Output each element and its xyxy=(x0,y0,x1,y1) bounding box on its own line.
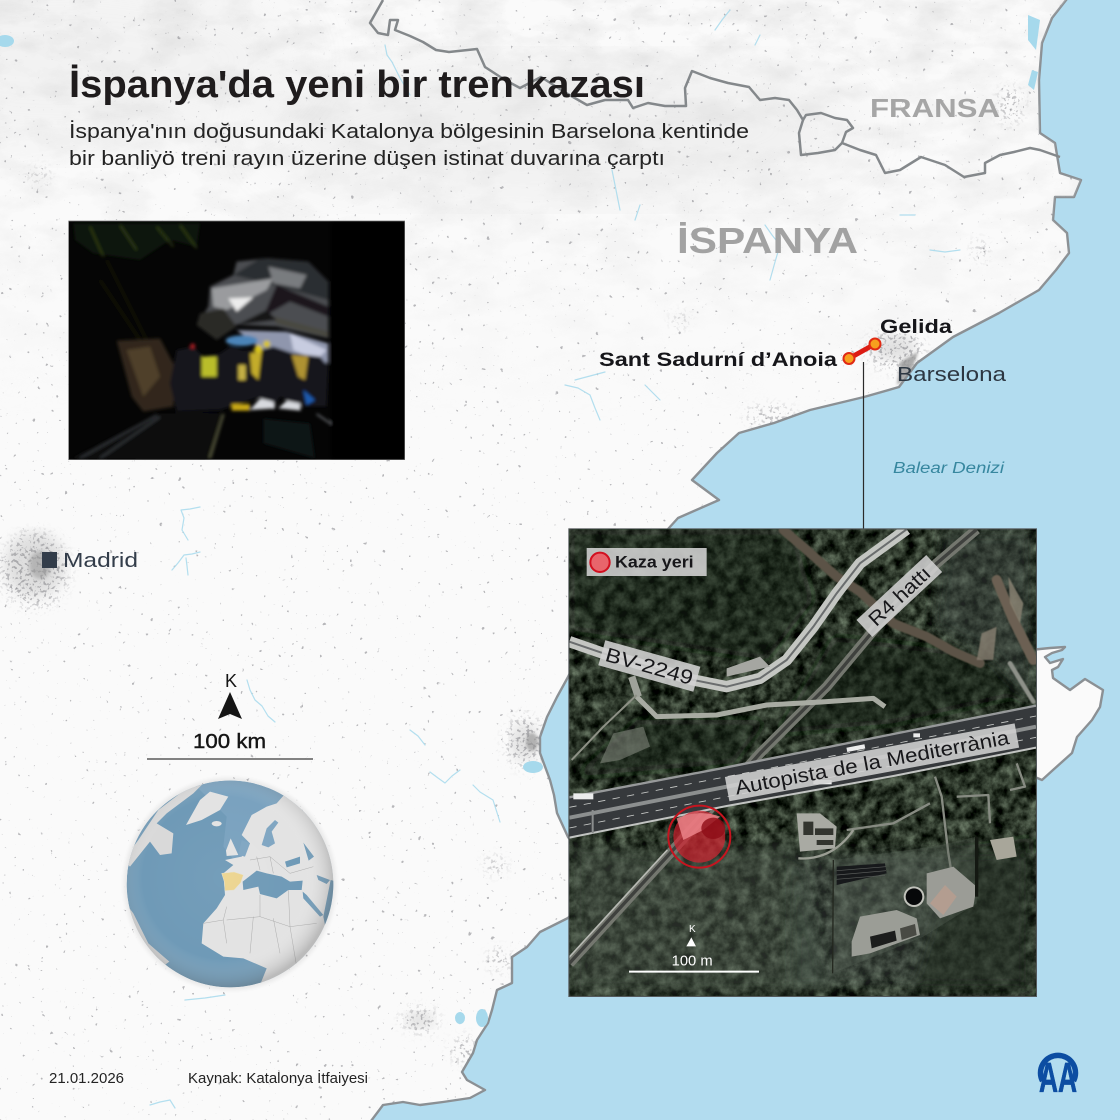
globe: North Sea xyxy=(242,843,250,857)
logo: Anadolu Agency xyxy=(1039,1054,1077,1101)
road label: BV-2249 xyxy=(598,640,700,692)
globe: British Isles xyxy=(226,838,238,856)
satellite: vegetation tones xyxy=(570,530,1033,993)
source: Kaynak: Katalonya İtfaiyesi xyxy=(188,1069,368,1087)
satellite: accident location xyxy=(668,806,730,868)
map: France–Spain border xyxy=(370,0,1060,177)
label: Spain: İSPANYA xyxy=(677,220,858,261)
label: Barselona: Barselona xyxy=(897,364,1007,386)
map scale: 100 km: 100 km xyxy=(193,731,266,753)
north arrow xyxy=(218,671,242,719)
locator globe xyxy=(123,778,343,993)
globe: Baltic xyxy=(262,820,278,847)
satellite north arrow xyxy=(686,924,696,946)
subtitle xyxy=(69,120,749,170)
road label: BV-2249: BV-2249 xyxy=(603,644,695,690)
route marker: Sant Sadurní d'Anoia to Gelida xyxy=(844,338,880,364)
map: island xyxy=(1030,647,1103,780)
satellite panel xyxy=(567,528,1037,997)
globe: country borders xyxy=(203,857,317,967)
label: Balearic Sea: Balear Denizi xyxy=(893,460,1005,477)
label: Sant Sadurní d'Anoia: Sant Sadurní d’Anoia xyxy=(599,350,838,371)
title: İspanya'da yeni bir tren kazası xyxy=(69,64,645,106)
road label: Autopista de la Mediterrània: Autopista de la Mediterrània xyxy=(733,727,1012,799)
photo: rescue workers xyxy=(170,347,328,412)
globe: South America xyxy=(130,908,170,964)
photo: stretchers and sheets xyxy=(250,398,301,411)
photo: foliage xyxy=(73,223,200,260)
globe: Europe, Asia and Africa xyxy=(202,796,334,982)
connector line to satellite panel xyxy=(862,362,864,530)
legend: accident site: Kaza yeri xyxy=(615,553,694,572)
logo: Anadolu Agency: AA xyxy=(1039,1054,1077,1101)
label: Gelida: Gelida xyxy=(880,317,953,338)
globe: Mediterranean xyxy=(243,871,303,898)
photo: umbrella xyxy=(226,335,258,346)
map: rivers and reservoirs xyxy=(150,10,960,1108)
globe: shallow northern seas xyxy=(196,780,287,858)
photo: train wreck xyxy=(197,258,328,338)
satellite: railway line xyxy=(567,529,977,963)
satellite north arrow: K xyxy=(689,924,696,935)
satellite: buildings and treatment plant xyxy=(600,727,1017,973)
north arrow: K xyxy=(225,671,237,691)
satellite scale: 100 m xyxy=(629,953,759,972)
globe: Spain highlighted xyxy=(222,872,243,891)
rail label: R4 line xyxy=(857,555,942,637)
globe: Greenland xyxy=(186,792,228,825)
label: France: FRANSA xyxy=(870,93,1000,123)
satellite: BV-2249 road xyxy=(569,529,907,687)
satellite: side road xyxy=(572,677,1025,883)
globe: Black Sea, Caspian, Red Sea, Gulf, Indian Ocean xyxy=(285,843,337,925)
subtitle: bir banliyö treni rayın üzerine düşen istinat duvarına çarptı xyxy=(69,148,665,170)
photo: rails xyxy=(70,413,220,459)
satellite scale: 100 m: 100 m xyxy=(672,953,713,970)
subtitle: İspanya'nın doğusundaki Katalonya bölgesinin Barselona kentinde xyxy=(69,120,749,143)
satellite: motorway xyxy=(569,705,1036,838)
date: 21.01.2026 xyxy=(49,1071,124,1087)
label: Madrid with marker: Madrid xyxy=(63,550,138,572)
photo: train wreck at night xyxy=(68,221,405,460)
rail label: R4 line: R4 hattı xyxy=(864,563,936,631)
legend: accident site xyxy=(587,548,707,576)
globe: North America xyxy=(128,784,202,866)
label: Madrid with marker xyxy=(42,550,138,572)
photo: rubble mound xyxy=(117,338,175,412)
satellite: river xyxy=(783,530,1033,702)
